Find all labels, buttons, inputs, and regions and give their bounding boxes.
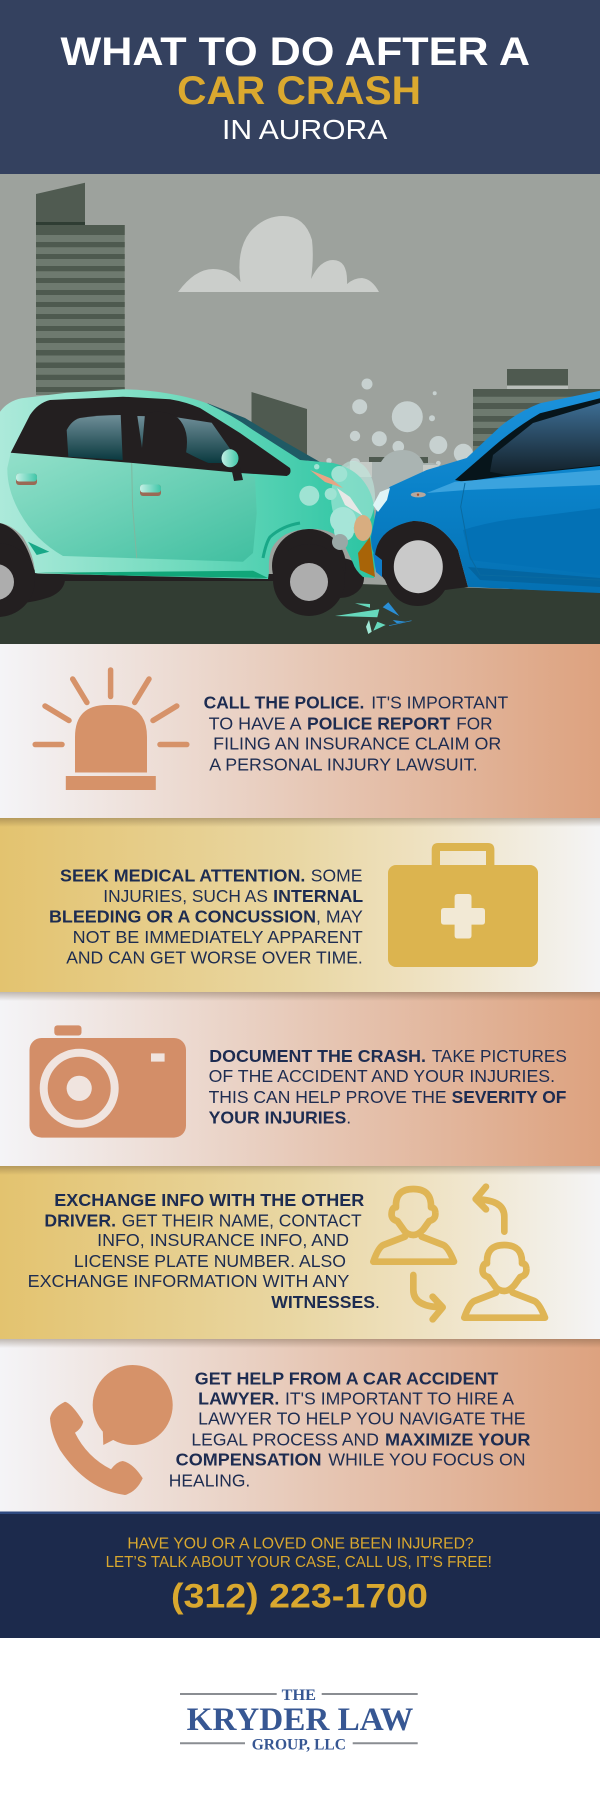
panel: get help from a lawyer — [0, 1339, 600, 1512]
road — [0, 568, 600, 644]
cloud — [178, 216, 379, 292]
text: seek medical attention: INTERNAL — [273, 886, 363, 906]
text: exchange info: GET THEIR NAME, CONTACT — [122, 1210, 362, 1230]
arrow: down-right — [413, 1275, 443, 1319]
text: get help: LAWYER. — [198, 1388, 279, 1408]
blue wheel — [394, 540, 443, 593]
icon: two people exchanging — [373, 1187, 545, 1319]
text: document the crash: SEVERITY OF — [452, 1087, 567, 1107]
panel: document the crash — [0, 992, 600, 1166]
text: document the crash: . — [346, 1107, 351, 1127]
text: call the police: A PERSONAL INJURY LAWSUIT. — [209, 754, 478, 774]
text: exchange info: INFO, INSURANCE INFO, AND — [97, 1230, 349, 1250]
sill — [38, 571, 268, 578]
text: document the crash: TAKE PICTURES — [432, 1046, 567, 1066]
text: seek medical attention: BLEEDING OR A CONCUSSION — [49, 906, 316, 926]
headlight — [373, 488, 390, 512]
panel: exchange info — [0, 1166, 600, 1339]
text: document the crash: YOUR INJURIES — [209, 1107, 347, 1127]
blue panels — [427, 470, 600, 493]
text: exchange info: DRIVER. — [44, 1210, 116, 1230]
text: seek medical attention: SEEK MEDICAL ATTENTION. — [60, 866, 305, 886]
text: get help: COMPENSATION — [176, 1450, 322, 1470]
text: document the crash — [209, 1046, 567, 1127]
text: document the crash: OF THE ACCIDENT AND YOUR INJURIES. — [209, 1066, 555, 1086]
text: get help: HEALING. — [169, 1471, 250, 1491]
title line 2: CAR CRASH — [177, 69, 421, 113]
text: exchange info — [28, 1190, 380, 1312]
logo: group llc: GROUP, LLC — [252, 1736, 346, 1753]
icon: siren — [35, 670, 187, 790]
wheels — [0, 543, 35, 617]
logo: the: THE — [282, 1687, 316, 1704]
icon: phone and speech bubble — [50, 1365, 173, 1495]
text: exchange info: . — [375, 1292, 380, 1312]
text: get help — [169, 1369, 531, 1491]
text: call the police: CALL THE POLICE. — [204, 693, 364, 713]
icon: camera — [30, 1025, 186, 1138]
logo — [180, 1687, 418, 1753]
text: call the police: POLICE REPORT — [307, 714, 451, 734]
blue window — [455, 398, 600, 482]
text: call the police: FOR — [456, 714, 492, 734]
text: get help: IT'S IMPORTANT TO HIRE A — [285, 1388, 514, 1408]
text: document the crash: DOCUMENT THE CRASH. — [209, 1046, 426, 1066]
panel: call the police — [0, 644, 600, 818]
text: exchange info: EXCHANGE INFO WITH THE OTHER — [54, 1190, 365, 1210]
green car — [0, 389, 376, 617]
mirror — [231, 467, 243, 481]
text: call the police: TO HAVE A — [209, 714, 302, 734]
crash illustration — [0, 174, 600, 644]
windows — [11, 397, 291, 476]
question text: HAVE YOU OR A LOVED ONE BEEN INJURED? — [127, 1536, 474, 1552]
text: seek medical attention: , MAY — [316, 906, 363, 926]
phone number: (312) 223-1700 — [171, 1578, 428, 1616]
damage — [299, 461, 375, 577]
text: seek medical attention: NOT BE IMMEDIATELY APPARENT — [73, 927, 363, 947]
debris shards — [335, 602, 412, 634]
text: exchange info: EXCHANGE INFORMATION WITH ANY — [28, 1271, 350, 1291]
text: get help: LAWYER TO HELP YOU NAVIGATE THE — [198, 1408, 525, 1428]
text: exchange info: LICENSE PLATE NUMBER. ALSO — [74, 1251, 346, 1271]
text: get help: GET HELP FROM A CAR ACCIDENT — [195, 1369, 499, 1389]
text: get help: MAXIMIZE YOUR — [385, 1430, 531, 1450]
door handles — [16, 474, 37, 485]
person 2 — [464, 1245, 545, 1318]
icon: medical kit — [388, 843, 538, 967]
text: call the police: IT'S IMPORTANT — [371, 693, 508, 713]
call to action footer — [0, 1512, 600, 1638]
door panel — [7, 453, 257, 562]
tall building — [36, 183, 125, 395]
middle building — [252, 392, 307, 510]
text: exchange info: WITNESSES — [271, 1292, 375, 1312]
panel: seek medical attention — [0, 818, 600, 992]
title line 1: WHAT TO DO AFTER A — [60, 30, 530, 74]
smoke — [326, 378, 473, 510]
text: seek medical attention: SOME — [311, 866, 362, 886]
logo: kryder law: KRYDER LAW — [187, 1702, 413, 1738]
person 1 — [373, 1189, 454, 1262]
text: get help: LEGAL PROCESS AND — [191, 1430, 379, 1450]
text: get help: WHILE YOU FOCUS ON — [328, 1450, 526, 1470]
text: seek medical attention: INJURIES, SUCH AS — [103, 886, 268, 906]
right building — [473, 369, 600, 469]
arrow: up-left — [476, 1187, 504, 1232]
call invitation text: LET’S TALK ABOUT YOUR CASE, CALL US, IT’S FREE! — [106, 1554, 492, 1571]
text: seek medical attention — [49, 866, 363, 968]
text: call the police: FILING AN INSURANCE CLAIM OR — [213, 734, 501, 754]
text: seek medical attention: AND CAN GET WORSE OVER TIME. — [66, 948, 363, 968]
header — [0, 0, 600, 174]
blue car — [371, 391, 600, 606]
text: call the police — [204, 693, 508, 774]
title line 3: IN AURORA — [222, 114, 388, 145]
text: document the crash: THIS CAN HELP PROVE THE — [209, 1087, 447, 1107]
